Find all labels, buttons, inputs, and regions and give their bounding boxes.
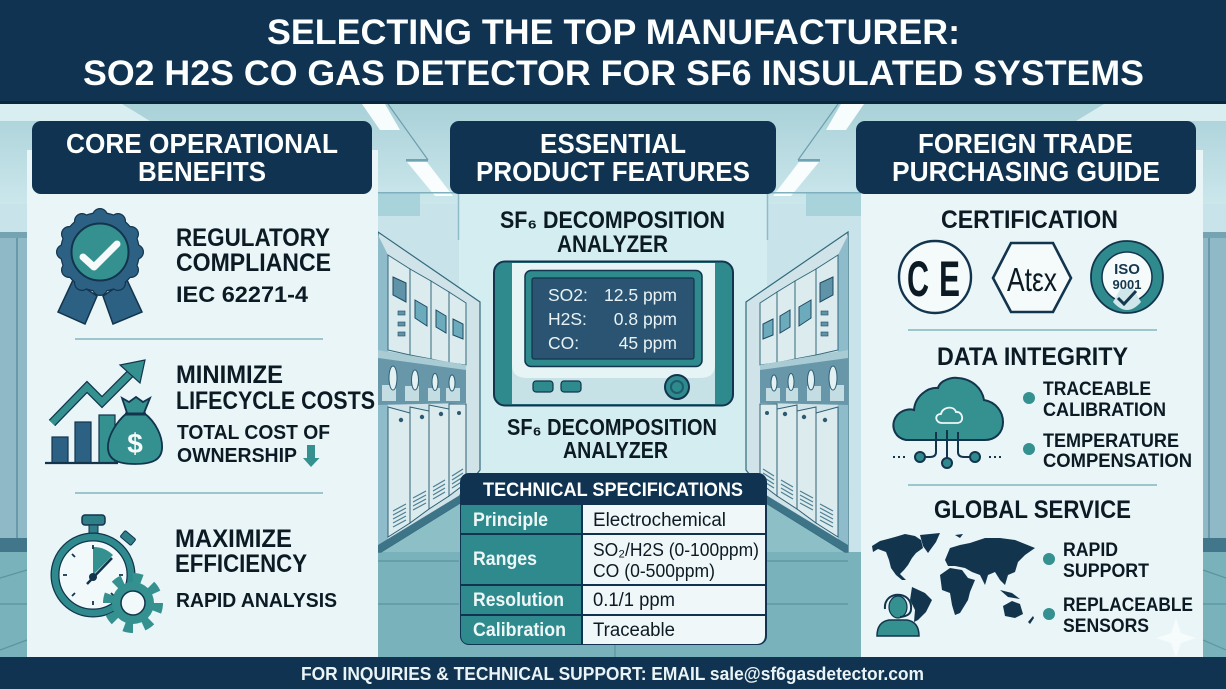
footer banner: FOR INQUIRIES & TECHNICAL SUPPORT: EMAIL sale@sf6gasdetector.com <box>301 663 924 684</box>
table: technical specifications <box>460 473 767 645</box>
icon: cost chart and money bag <box>45 360 162 464</box>
bullet list: global service: REPLACEABLE <box>1063 594 1193 616</box>
screen readings: H2S: <box>548 309 587 329</box>
screen readings <box>548 285 677 353</box>
table: technical specifications: TECHNICAL SPECIFICATIONS <box>483 479 743 501</box>
heading: core operational benefits: CORE OPERATIONAL <box>66 128 338 159</box>
title banner: SELECTING THE TOP MANUFACTURER: <box>267 12 960 52</box>
bullet list: global service: SUPPORT <box>1063 560 1149 582</box>
table: technical specifications: CO (0-500ppm) <box>593 560 715 581</box>
heading: essential product features <box>450 121 776 194</box>
heading: foreign trade purchasing guide <box>856 121 1196 194</box>
title banner: SO2 H2S CO GAS DETECTOR FOR SF6 INSULATED SYSTEMS <box>83 53 1144 93</box>
screen readings: CO: <box>548 333 579 353</box>
icon: gas analyzer device <box>494 262 733 406</box>
text: regulatory compliance: REGULATORY <box>176 225 330 252</box>
text: analyzer label bottom: ANALYZER <box>563 437 668 463</box>
footer banner <box>0 657 1226 689</box>
icon: world map with support agent <box>872 533 1035 636</box>
text: analyzer label top: ANALYZER <box>557 231 668 258</box>
icon: ATEX hexagon <box>993 243 1071 312</box>
icon: ISO 9001 badge <box>1091 241 1163 313</box>
bullet list: data integrity: COMPENSATION <box>1043 450 1192 472</box>
screen readings: 12.5 ppm <box>604 285 677 305</box>
icon: cost chart and money bag: $ <box>127 428 143 459</box>
icon: ISO 9001 badge: ISO <box>1114 261 1140 278</box>
icon: CE mark: E <box>939 251 960 307</box>
table: technical specifications: SO₂/H2S (0-100ppm) <box>593 539 759 560</box>
icon: award rosette with check <box>56 208 144 324</box>
heading: essential product features: ESSENTIAL <box>540 128 686 159</box>
icon: ISO 9001 badge: 9001 <box>1113 277 1141 292</box>
panel: essential product features <box>450 121 776 645</box>
bullet list: global service: SENSORS <box>1063 615 1149 637</box>
screen readings: 45 ppm <box>619 333 677 353</box>
text: regulatory compliance: COMPLIANCE <box>176 250 331 277</box>
icon: CE mark <box>899 241 971 313</box>
heading: core operational benefits: BENEFITS <box>138 156 266 187</box>
panel: foreign trade purchasing guide <box>856 121 1203 658</box>
heading: certification: CERTIFICATION <box>941 207 1118 234</box>
center panel backdrop <box>459 190 767 480</box>
heading: foreign trade purchasing guide: FOREIGN TRADE <box>918 128 1133 159</box>
bullet list: data integrity: CALIBRATION <box>1043 399 1166 421</box>
text: maximize efficiency: EFFICIENCY <box>175 551 307 578</box>
text: regulatory compliance: IEC 62271-4 <box>176 282 309 307</box>
table: technical specifications: Traceable <box>593 620 675 641</box>
table: technical specifications: Electrochemical <box>593 510 726 531</box>
bullet list: data integrity <box>1023 378 1192 472</box>
icon: CE mark: C <box>907 251 929 307</box>
text: analyzer label bottom: SF₆ DECOMPOSITION <box>507 414 717 440</box>
text: minimize lifecycle costs <box>176 362 375 467</box>
text: analyzer label top: SF₆ DECOMPOSITION <box>500 207 725 234</box>
icon: down arrow <box>303 445 320 467</box>
title banner <box>0 0 1226 104</box>
text: minimize lifecycle costs: LIFECYCLE COSTS <box>176 388 375 415</box>
text: minimize lifecycle costs: OWNERSHIP <box>177 444 297 467</box>
text: regulatory compliance <box>176 225 331 307</box>
bullet list: global service: RAPID <box>1063 539 1118 561</box>
bullet list: global service <box>1043 539 1193 637</box>
text: maximize efficiency: RAPID ANALYSIS <box>176 590 337 612</box>
heading: core operational benefits <box>32 121 372 194</box>
icon: ATEX hexagon: Atεx <box>1007 261 1057 298</box>
heading: foreign trade purchasing guide: PURCHASING GUIDE <box>892 156 1160 187</box>
text: minimize lifecycle costs: MINIMIZE <box>176 362 283 389</box>
panel: core operational benefits <box>27 121 378 657</box>
heading: essential product features: PRODUCT FEATURES <box>476 156 750 187</box>
table: technical specifications: 0.1/1 ppm <box>593 590 675 611</box>
text: maximize efficiency <box>175 526 337 612</box>
text: minimize lifecycle costs: TOTAL COST OF <box>177 421 330 444</box>
table: technical specifications: Principle <box>473 510 548 531</box>
heading: global service: GLOBAL SERVICE <box>934 497 1131 524</box>
screen readings: SO2: <box>548 285 588 305</box>
text: maximize efficiency: MAXIMIZE <box>175 526 292 553</box>
icon: sparkle watermark <box>1156 618 1196 658</box>
table: technical specifications: Ranges <box>473 549 537 570</box>
icon: stopwatch and gear <box>55 515 158 628</box>
text: analyzer label top <box>500 207 725 258</box>
heading: data integrity: DATA INTEGRITY <box>937 344 1129 371</box>
bullet list: data integrity: TRACEABLE <box>1043 378 1151 400</box>
table: technical specifications: Calibration <box>473 620 566 641</box>
bullet list: data integrity: TEMPERATURE <box>1043 430 1179 452</box>
table: technical specifications: Resolution <box>473 590 564 611</box>
screen readings: 0.8 ppm <box>614 309 677 329</box>
icon: cloud network <box>893 378 1003 468</box>
text: analyzer label bottom <box>507 414 717 463</box>
